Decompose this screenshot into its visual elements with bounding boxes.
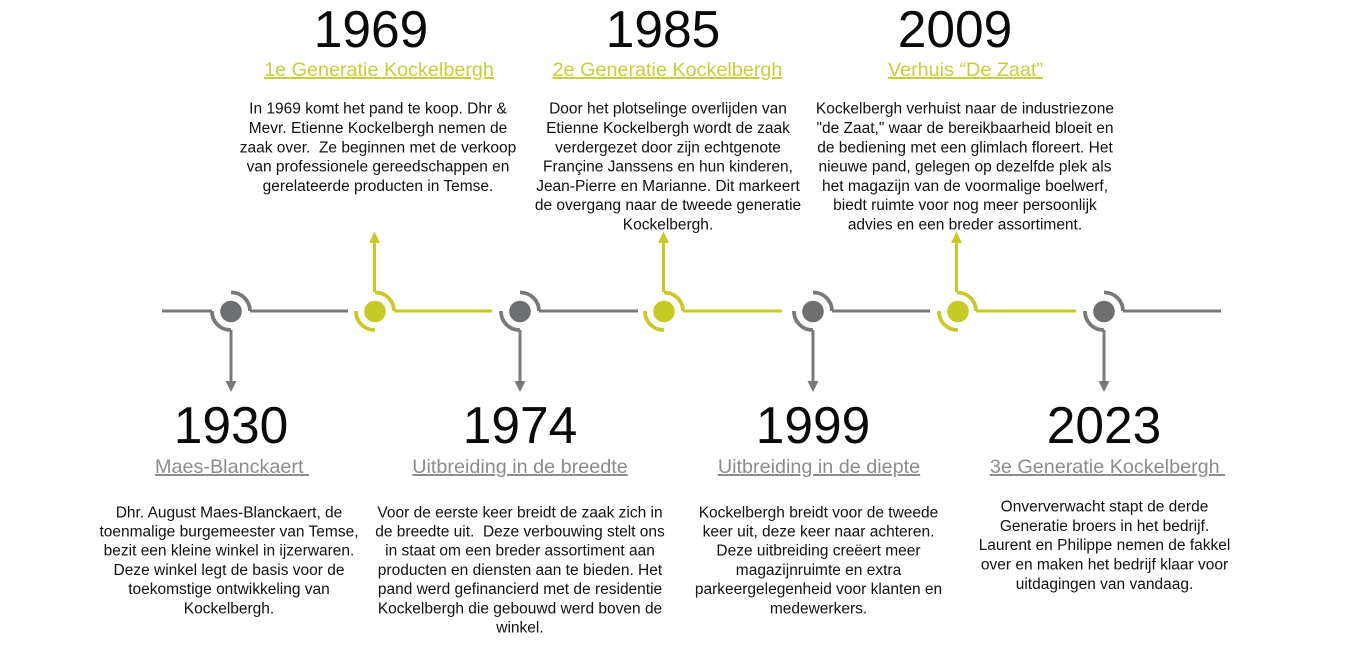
heading: 1e Generatie Kockelbergh bbox=[264, 59, 494, 81]
year: 2023 bbox=[1047, 396, 1161, 454]
text block: uitdagingen van vandaag. bbox=[1016, 576, 1193, 593]
text block: van professionele gereedschappen en bbox=[247, 158, 509, 176]
text block: bezit een kleine winkel in ijzerwaren. bbox=[104, 542, 354, 560]
heading: Uitbreiding in de breedte bbox=[412, 456, 628, 478]
text block: gerelateerde producten in Temse. bbox=[263, 178, 493, 195]
text block: keer uit, deze keer naar achteren. bbox=[703, 524, 934, 540]
text block: parkeergelegenheid voor klanten en bbox=[695, 581, 942, 598]
text block bbox=[816, 100, 1114, 234]
timeline bbox=[162, 232, 1221, 392]
panel: 2023 bbox=[979, 396, 1230, 593]
text block: Mevr. Etienne Kockelbergh nemen de bbox=[249, 120, 507, 137]
panel: 1930 bbox=[99, 396, 359, 618]
node 2023 bbox=[1085, 292, 1221, 392]
heading: Verhuis “De Zaat” bbox=[888, 59, 1043, 81]
text block: verdergezet door zijn echtgenote bbox=[555, 140, 781, 156]
text block bbox=[535, 100, 801, 234]
text block: advies en een breder assortiment. bbox=[848, 216, 1082, 234]
year: 2009 bbox=[898, 0, 1012, 58]
heading: Uitbreiding in de diepte bbox=[718, 456, 920, 478]
text block bbox=[99, 504, 359, 618]
text block: Kockelbergh. bbox=[184, 600, 274, 618]
text block: Kockelbergh. bbox=[623, 216, 713, 234]
text block: biedt ruimte voor nog meer persoonlijk bbox=[833, 197, 1097, 214]
panel: 2009 bbox=[816, 0, 1114, 234]
text block: Kockelbergh die gebouwd werd boven de bbox=[378, 600, 662, 618]
heading: 2e Generatie Kockelbergh bbox=[553, 59, 782, 81]
text block: de bediening met een glimlach floreert. Het bbox=[817, 140, 1113, 156]
text block: medewerkers. bbox=[770, 600, 867, 618]
year: 1930 bbox=[174, 396, 288, 454]
text block: het magazijn van de voormalige boelwerf, bbox=[822, 178, 1108, 195]
text block: Door het plotselinge overlijden van bbox=[549, 100, 787, 118]
year: 1999 bbox=[756, 396, 870, 454]
node 2009 bbox=[939, 232, 1076, 330]
text block: Kockelbergh breidt voor de tweede bbox=[699, 504, 938, 522]
year: 1969 bbox=[314, 0, 428, 58]
text block: toekomstige ontwikkeling van bbox=[128, 581, 330, 598]
text block bbox=[979, 498, 1230, 593]
text block: over en maken het bedrijf klaar voor bbox=[981, 556, 1228, 574]
node 1974 bbox=[501, 292, 638, 392]
text block: Kockelbergh verhuist naar de industriezone bbox=[816, 100, 1114, 118]
node 1930 bbox=[162, 292, 348, 392]
text block: Voor de eerste keer breidt de zaak zich in bbox=[377, 504, 663, 522]
text block: Deze uitbreiding creëert meer bbox=[716, 542, 921, 560]
text block: magazijnruimte en extra bbox=[736, 562, 902, 579]
text block: Generatie broers in het bedrijf. bbox=[1000, 518, 1209, 535]
text block: Deze winkel legt de basis voor de bbox=[114, 562, 344, 579]
text block: Onververwacht stapt de derde bbox=[1001, 498, 1208, 516]
panel: 1969 bbox=[240, 0, 516, 195]
text block bbox=[240, 100, 516, 195]
year: 1985 bbox=[606, 0, 720, 58]
text block: In 1969 komt het pand te koop. Dhr & bbox=[249, 100, 507, 118]
heading: 3e Generatie Kockelbergh bbox=[990, 456, 1225, 478]
text block: winkel. bbox=[495, 620, 544, 636]
text block bbox=[375, 504, 665, 636]
text block: nieuwe pand, gelegen op dezelfde plek als bbox=[818, 158, 1112, 176]
node 1969 bbox=[356, 232, 492, 330]
panel: 1999 bbox=[695, 396, 942, 618]
text block: de overgang naar de tweede generatie bbox=[535, 197, 801, 214]
text block: "de Zaat," waar de bereikbaarheid bloeit en bbox=[816, 120, 1114, 137]
text block: Etienne Kockelbergh wordt de zaak bbox=[546, 120, 790, 137]
text block: de breedte uit. Deze verbouwing stelt ons bbox=[375, 524, 665, 540]
node 1999 bbox=[794, 292, 930, 392]
text block: Laurent en Philippe nemen de fakkel bbox=[979, 537, 1230, 554]
panel: 1985 bbox=[535, 0, 801, 234]
text block: Françine Janssens en hun kinderen, bbox=[543, 158, 793, 176]
heading: Maes-Blanckaert bbox=[155, 456, 309, 478]
text block: in staat om een breder assortiment aan bbox=[385, 542, 655, 560]
node 1985 bbox=[645, 232, 782, 330]
text block: toenmalige burgemeester van Temse, bbox=[99, 524, 359, 540]
year: 1974 bbox=[463, 396, 577, 454]
panel: 1974 bbox=[375, 396, 665, 636]
text block: zaak over. Ze beginnen met de verkoop bbox=[240, 140, 516, 156]
text block: producten en diensten aan te bieden. Het bbox=[378, 562, 663, 579]
text block: pand werd gefinancierd met de residentie bbox=[378, 581, 662, 598]
text block: Jean-Pierre en Marianne. Dit markeert bbox=[536, 178, 800, 195]
text block bbox=[695, 504, 942, 618]
text block: Dhr. August Maes-Blanckaert, de bbox=[116, 504, 342, 522]
